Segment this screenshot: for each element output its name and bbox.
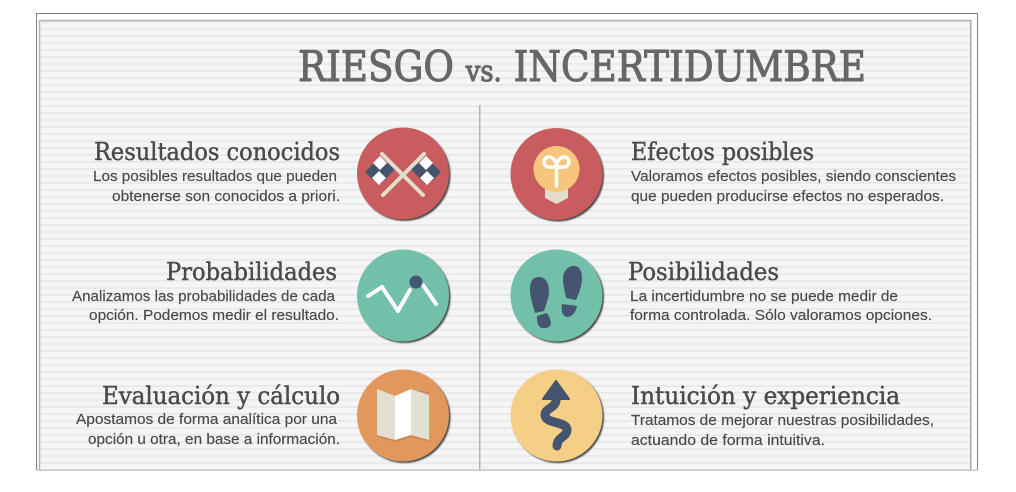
text: intuición y experiencia: Tratamos de mejorar nuestras posibilidades,: [631, 412, 934, 429]
icon: winding road arrow: [510, 370, 604, 463]
text: evaluación y cálculo: Apostamos de forma analítica por una: [76, 411, 338, 428]
text: intuición y experiencia: actuando de forma intuitiva.: [631, 432, 825, 449]
text: intuición y experiencia: [631, 412, 934, 449]
text: posibilidades: La incertidumbre no se puede medir de: [630, 288, 898, 305]
panel: intuición y experiencia: [631, 382, 934, 449]
text: evaluación y cálculo: [76, 411, 340, 448]
panel: posibilidades: [628, 258, 932, 324]
heading: evaluación y cálculo: Evaluación y cálculo: [102, 382, 340, 410]
text: evaluación y cálculo: opción u otra, en base a información.: [88, 431, 340, 448]
heading: resultados conocidos: Resultados conocidos: [94, 138, 340, 166]
text: resultados conocidos: [93, 168, 340, 205]
panel: efectos posibles: [631, 138, 956, 205]
text: efectos posibles: [631, 168, 956, 205]
text: probabilidades: [72, 288, 339, 324]
panel: evaluación y cálculo: [76, 382, 340, 448]
text: efectos posibles: Valoramos efectos posibles, siendo conscientes: [631, 168, 956, 185]
icon: folded map: [357, 370, 450, 463]
icon: footprints: [510, 250, 604, 343]
heading: efectos posibles: Efectos posibles: [631, 138, 814, 166]
icon: checkered flags: [357, 128, 450, 221]
heading: intuición y experiencia: Intuición y experiencia: [631, 382, 900, 410]
heading: probabilidades: Probabilidades: [166, 258, 337, 286]
text: efectos posibles: que pueden producirse efectos no esperados.: [631, 188, 944, 205]
text: posibilidades: forma controlada. Sólo valoramos opciones.: [630, 307, 932, 324]
panel: resultados conocidos: [93, 138, 340, 205]
heading: posibilidades: Posibilidades: [628, 258, 779, 286]
panel: probabilidades: [72, 258, 339, 324]
text: resultados conocidos: obtenerse son conocidos a priori.: [112, 188, 340, 205]
text: probabilidades: Analizamos las probabilidades de cada: [72, 288, 336, 305]
title: RIESGO vs. INCERTIDUMBRE: [298, 42, 866, 91]
center divider: [479, 105, 480, 470]
text: resultados conocidos: Los posibles resultados que pueden: [93, 168, 337, 185]
text: posibilidades: [630, 288, 932, 324]
icon: line chart: [357, 250, 450, 343]
text: probabilidades: opción. Podemos medir el resultado.: [89, 307, 339, 324]
icon: light bulb: [510, 128, 604, 222]
